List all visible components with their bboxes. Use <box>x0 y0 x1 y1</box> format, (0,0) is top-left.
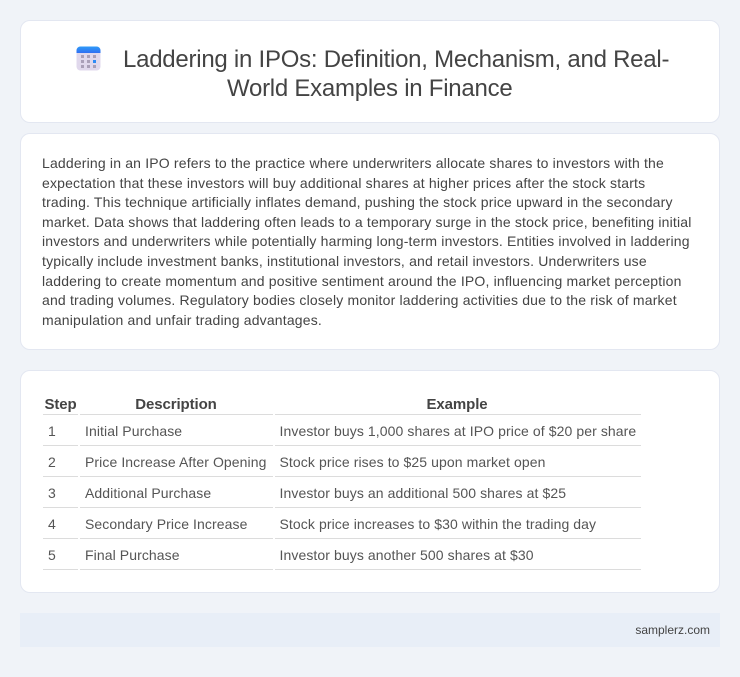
text block: laddering explanation: typically include investment banks, institutional investors, and retail investors. Underwriters use <box>42 253 647 269</box>
footer bar <box>20 613 720 647</box>
title: Laddering in IPOs: Definition, Mechanism, and Real- <box>123 46 669 73</box>
row 2 <box>48 454 545 470</box>
row 5: 5 <box>48 547 56 563</box>
table header <box>44 396 488 412</box>
row 4: Stock price increases to $30 within the trading day <box>280 516 596 532</box>
title <box>123 46 669 102</box>
row 2: Stock price rises to $25 upon market open <box>280 454 545 470</box>
text block: laddering explanation <box>42 155 692 328</box>
table: laddering steps <box>43 396 641 570</box>
text block: laddering explanation: expectation that these investors will buy additional shares at higher prices after the stock starts <box>42 175 645 191</box>
row 1: Initial Purchase <box>85 423 182 439</box>
row 4 <box>48 516 596 532</box>
table header: Example <box>426 396 488 412</box>
row 4: Secondary Price Increase <box>85 516 247 532</box>
row 1 <box>48 423 636 439</box>
text block: laddering explanation: manipulation and unfair trading advantages. <box>42 312 322 328</box>
footer text: samplerz.com <box>635 623 710 637</box>
row 2: 2 <box>48 454 56 470</box>
icon: calendar <box>76 46 100 70</box>
table header: Description <box>135 396 217 412</box>
text block: laddering explanation: trading. This technique artificially inflates demand, pushing the stock price upward in the secondary <box>42 194 673 210</box>
row 1: Investor buys 1,000 shares at IPO price of $20 per share <box>280 423 636 439</box>
row 5: Final Purchase <box>85 547 180 563</box>
title: World Examples in Finance <box>227 75 512 102</box>
panel: title header <box>20 20 720 123</box>
text block: laddering explanation: investors and underwriters while potentially harming long-term investors. Entities involved in laddering <box>42 233 690 249</box>
panel: table <box>20 370 720 593</box>
row 1: 1 <box>48 423 56 439</box>
row 3: Investor buys an additional 500 shares at $25 <box>280 485 566 501</box>
text block: laddering explanation: market. Data shows that laddering often leads to a temporary surge in the stock price, benefiting initial <box>42 214 692 230</box>
text block: laddering explanation: and trading volumes. Regulatory bodies closely monitor laddering activities due to the risk of market <box>42 292 677 308</box>
text block: laddering explanation: laddering to create momentum and positive sentiment around the IPO, influencing market perception <box>42 273 682 289</box>
row 3: 3 <box>48 485 56 501</box>
row 5: Investor buys another 500 shares at $30 <box>280 547 534 563</box>
text block: laddering explanation: Laddering in an IPO refers to the practice where underwriters allocate shares to investors with the <box>42 155 664 171</box>
table header: Step <box>44 396 77 412</box>
panel: description <box>20 133 720 350</box>
row 3: Additional Purchase <box>85 485 211 501</box>
row 5 <box>48 547 534 563</box>
row 2: Price Increase After Opening <box>85 454 267 470</box>
row 3 <box>48 485 566 501</box>
row 4: 4 <box>48 516 56 532</box>
